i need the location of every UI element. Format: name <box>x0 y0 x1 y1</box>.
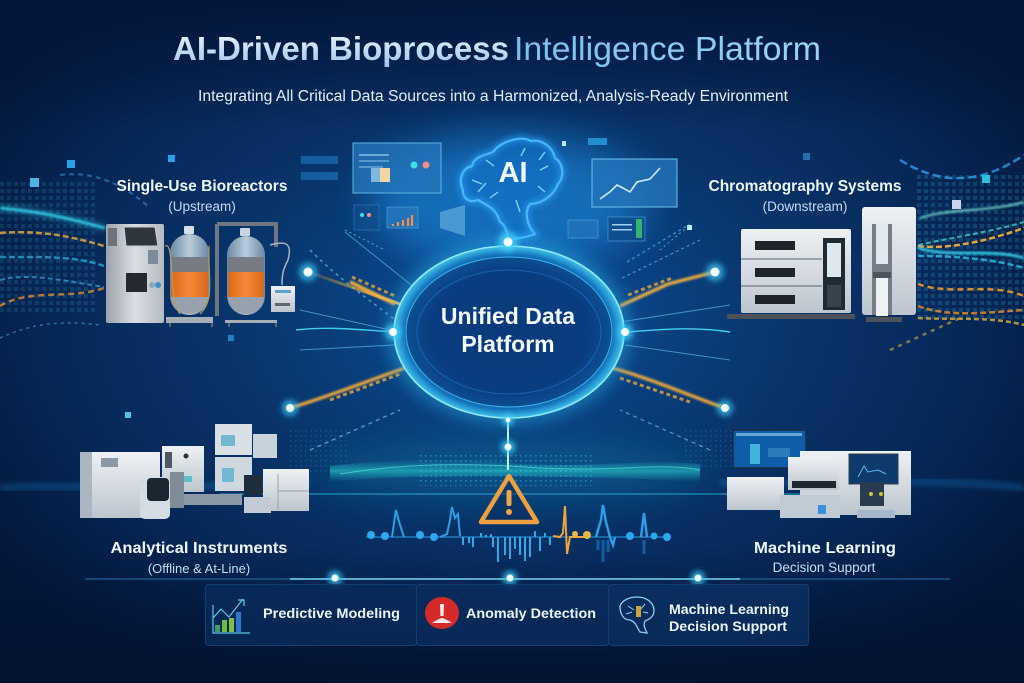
console <box>106 224 164 323</box>
dashboard: line chart <box>592 159 677 207</box>
central instrument <box>780 457 840 518</box>
signal waveform <box>366 505 671 562</box>
text: analytical instruments label <box>110 540 288 576</box>
frame <box>217 224 276 316</box>
text: predictive modeling: Predictive Modeling <box>263 605 400 621</box>
panel: anomaly detection <box>416 584 608 646</box>
equipment: chromatography <box>727 207 916 322</box>
large box <box>80 452 160 518</box>
right cabinet <box>244 469 309 513</box>
title: AI-Driven Bioprocess <box>173 30 509 67</box>
low cabinet <box>727 477 784 510</box>
icon: brain <box>620 597 654 633</box>
icon: red alert <box>425 597 459 629</box>
title: Intelligence Platform <box>514 30 821 67</box>
dashboard: status list <box>608 217 645 241</box>
text: single-use bioreactors label: (Upstream) <box>168 199 236 214</box>
bottom divider line with nodes <box>85 571 950 585</box>
monitor <box>733 430 806 468</box>
text: chromatography systems label <box>708 178 902 214</box>
central hub: unified data platform: Platform <box>461 331 555 357</box>
text: single-use bioreactors label <box>116 178 288 214</box>
dashboard: scatter <box>568 220 598 238</box>
title <box>173 30 821 67</box>
module <box>162 446 204 492</box>
vessel 1 <box>165 226 213 327</box>
central hub: unified data platform <box>387 240 631 424</box>
text: chromatography systems label: (Downstream) <box>763 199 847 214</box>
text: anomaly detection: Anomaly Detection <box>466 605 596 621</box>
stacked modules <box>727 229 855 319</box>
text: machine learning decision support: Machine Learning <box>669 601 789 617</box>
subtitle: Integrating All Critical Data Sources into a Harmonized, Analysis-Ready Environment <box>198 88 789 105</box>
right data streams <box>622 153 1024 350</box>
screen and base <box>849 454 898 518</box>
text: machine learning label: Machine Learning <box>754 540 896 557</box>
stacked upper <box>215 424 277 491</box>
panel: machine learning decision support <box>608 584 808 646</box>
vessel 2 <box>225 228 289 327</box>
dashboard: small status <box>354 205 379 230</box>
text: machine learning label <box>754 540 896 575</box>
icon: growth chart <box>213 599 250 633</box>
equipment: analytical instruments <box>80 424 309 519</box>
column tower <box>862 207 916 322</box>
equipment: bioreactors <box>106 224 295 327</box>
text: analytical instruments label: Analytical Instruments <box>110 540 288 557</box>
dashboard: bar chart <box>387 207 418 228</box>
dashboard panels behind AI <box>345 138 690 250</box>
bench <box>170 494 242 505</box>
connector lines to hub <box>265 240 750 470</box>
icon: AI brain <box>461 139 562 240</box>
dashboard: table <box>353 143 441 193</box>
text: machine learning label: Decision Support <box>773 560 876 575</box>
text: chromatography systems label: Chromatography Systems <box>708 178 902 195</box>
equipment: machine learning stations <box>727 430 911 518</box>
icon: warning triangle <box>481 476 537 522</box>
dark handheld <box>140 477 170 519</box>
teal wave band <box>220 452 830 494</box>
panel: machine learning decision support: Decision Support <box>669 618 787 634</box>
panel: predictive modeling <box>206 584 416 646</box>
left data streams <box>0 155 430 341</box>
text: analytical instruments label: (Offline & At-Line) <box>148 561 250 576</box>
text: hub label: Unified Data <box>441 303 575 329</box>
text: single-use bioreactors label: Single-Use Bioreactors <box>116 178 288 195</box>
lower left and right data streams <box>0 410 1024 488</box>
small unit <box>271 286 295 312</box>
back console <box>800 451 911 515</box>
text: AI: AI <box>498 157 528 189</box>
glowing nodes <box>282 232 733 454</box>
